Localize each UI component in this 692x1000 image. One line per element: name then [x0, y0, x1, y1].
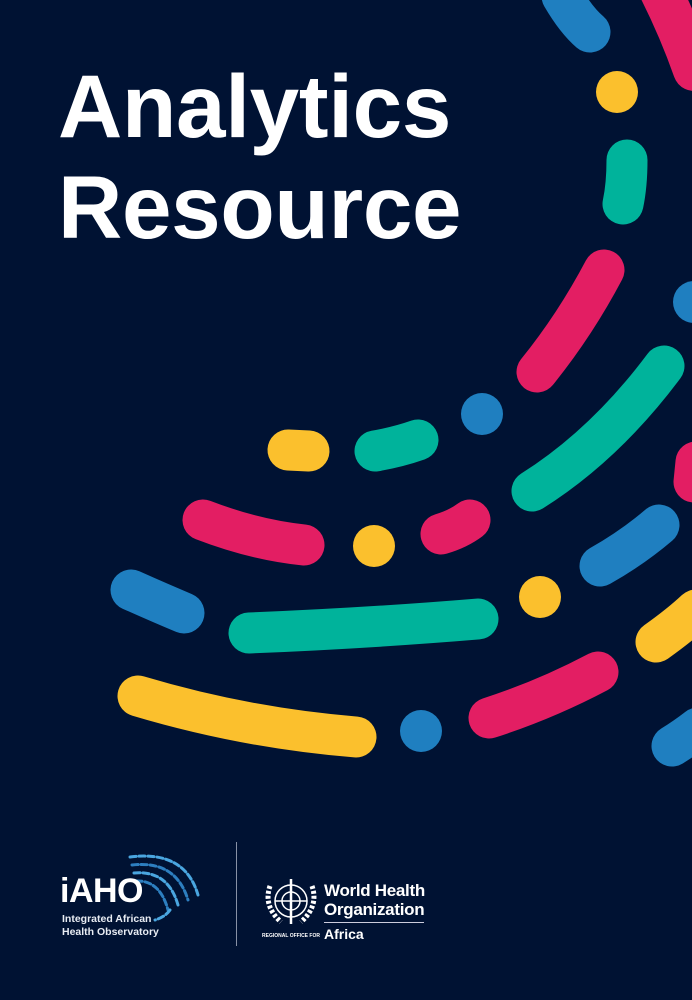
icon: iAHO arcs: [128, 854, 200, 922]
logo: iAHO: Integrated African: [62, 913, 151, 925]
logo: WHO Africa: [262, 879, 425, 942]
title: Resource: [58, 157, 461, 257]
title: [58, 56, 461, 257]
logo: WHO Africa: Organization: [324, 900, 424, 919]
logo: iAHO: [60, 854, 200, 938]
logo: WHO Africa: World Health: [324, 881, 425, 900]
logo: WHO Africa: REGIONAL OFFICE FOR: [262, 933, 320, 939]
icon: WHO emblem: [266, 879, 316, 924]
logo: iAHO: iAHO: [60, 872, 143, 910]
title: Analytics: [58, 56, 451, 156]
divider: [236, 842, 237, 946]
logo: WHO Africa: Africa: [324, 926, 364, 942]
logo: iAHO: Health Observatory: [62, 926, 159, 938]
